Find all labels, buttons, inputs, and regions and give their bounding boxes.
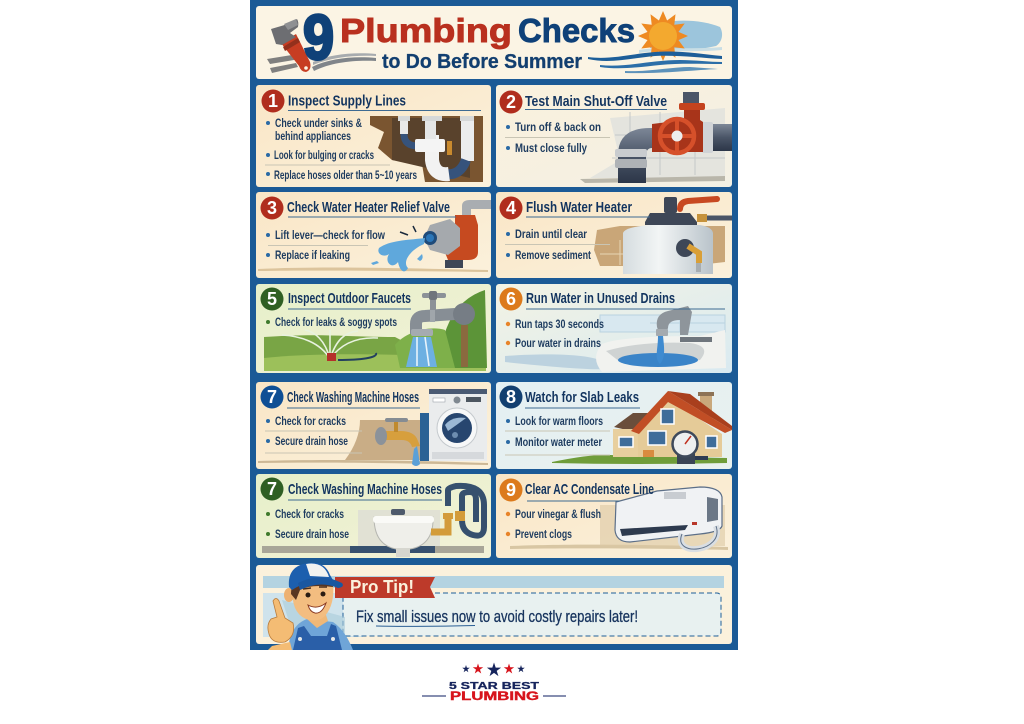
- panel: 2 test main shut-off valve: [496, 85, 732, 187]
- subtitle: to Do Before Summer: [382, 51, 582, 73]
- number badge: [500, 196, 522, 220]
- illustration: sink and hoses: [262, 486, 484, 557]
- card title: Watch for Slab Leaks: [525, 389, 639, 406]
- number badge: [500, 90, 522, 114]
- number badge: 2: [506, 92, 516, 112]
- bullet list: [266, 507, 349, 541]
- title number: 9: [303, 3, 334, 73]
- illustration: water heater tank: [594, 197, 732, 274]
- bullet list: Pour vinegar & flush: [515, 507, 601, 521]
- callout box: [343, 593, 721, 636]
- number badge: [260, 288, 284, 310]
- number badge: 9: [506, 480, 516, 500]
- bullet list: Check for cracks: [275, 414, 346, 428]
- bullet list: Remove sediment: [515, 248, 591, 262]
- illustration: valve: [580, 92, 732, 183]
- panel: 1 inspect supply lines: [256, 85, 491, 187]
- panel: 4 flush water heater: [496, 192, 732, 278]
- bullet list: Must close fully: [515, 141, 587, 155]
- logo: 5 STAR BEST: [449, 681, 539, 692]
- illustration: air conditioner: [600, 487, 725, 549]
- bullet list: [505, 227, 610, 262]
- logo: PLUMBING: [450, 691, 539, 703]
- bullet list: Check for leaks & soggy spots: [275, 315, 397, 329]
- panel: header: Checks: [518, 12, 635, 49]
- panel: 8 watch for slab leaks: [496, 382, 732, 469]
- illustration: faucet and sink: [505, 306, 726, 372]
- panel: 7 check washing machine hoses: [256, 382, 491, 469]
- bullet list: Secure drain hose: [275, 434, 348, 448]
- logo: [422, 662, 566, 703]
- card title: Clear AC Condensate Line: [525, 481, 654, 498]
- number badge: 1: [268, 91, 278, 111]
- number badge: [260, 196, 284, 220]
- panel: 6 run water in unused drains: [496, 284, 732, 373]
- background frame: [250, 0, 738, 650]
- title: Plumbing: [340, 12, 512, 49]
- bullet list: Check under sinks &: [275, 116, 362, 130]
- card title: Inspect Supply Lines: [288, 92, 406, 110]
- illustration: lawn, sprinkler and faucet: [264, 290, 487, 371]
- bullet list: Run taps 30 seconds: [515, 317, 604, 331]
- bullet list: Replace hoses older than 5~10 years: [274, 168, 417, 182]
- bullet list: Check for cracks: [275, 507, 344, 521]
- number badge: 6: [506, 289, 516, 309]
- number badge: 7: [267, 479, 277, 499]
- number badge: 8: [506, 387, 516, 407]
- card title: Test Main Shut-Off Valve: [525, 93, 667, 110]
- card title: Flush Water Heater: [526, 199, 632, 216]
- banner: pro tip: Pro Tip!: [350, 577, 414, 597]
- number badge: 7: [267, 387, 277, 407]
- number badge: 5: [267, 289, 277, 309]
- illustration: tap and washing machine: [345, 389, 487, 466]
- bullet list: Replace if leaking: [275, 248, 350, 262]
- illustration: house with water meter: [552, 391, 732, 464]
- icon: wrench and brush strokes: [267, 19, 376, 73]
- card title: Check Washing Machine Hoses: [287, 389, 419, 406]
- number badge: [260, 386, 284, 408]
- bullet list: [505, 120, 610, 155]
- bullet list: [266, 228, 386, 262]
- panel: 3 water heater relief valve: [256, 192, 491, 278]
- card title: Check Water Heater Relief Valve: [287, 199, 450, 216]
- illustration: mechanic: [268, 563, 353, 650]
- bullet list: [506, 317, 604, 350]
- logo stars: [462, 662, 525, 676]
- panel: header: [256, 3, 732, 79]
- bullet list: Secure drain hose: [275, 527, 349, 541]
- panel: 9 clear ac condensate line: [496, 474, 732, 558]
- card title: Inspect Outdoor Faucets: [288, 290, 411, 307]
- illustration: pipes under sink: [370, 116, 483, 182]
- bullet list: [266, 315, 397, 329]
- bullet list: behind appliances: [275, 129, 351, 143]
- number badge: 4: [506, 198, 516, 218]
- bullet list: Lift lever—check for flow: [275, 228, 386, 242]
- bullet list: Drain until clear: [515, 227, 587, 241]
- card title: Check Washing Machine Hoses: [288, 481, 442, 498]
- bullet list: Monitor water meter: [515, 435, 602, 449]
- bullet list: Prevent clogs: [515, 527, 572, 541]
- bullet list: [505, 414, 610, 455]
- card title: Run Water in Unused Drains: [526, 290, 675, 307]
- bullet list: Look for bulging or cracks: [274, 148, 374, 162]
- number badge: [500, 288, 522, 310]
- panel: pro tip: [256, 563, 732, 650]
- number badge: [260, 478, 284, 500]
- icon: sun and waves: [588, 11, 722, 73]
- number badge: [500, 478, 522, 502]
- tip text: Fix small issues now to avoid costly repairs later!: [356, 607, 638, 626]
- number badge: [500, 386, 522, 408]
- panel: 5 inspect outdoor faucets: [256, 284, 491, 373]
- bullet list: Pour water in drains: [515, 336, 601, 350]
- bullet list: [506, 507, 601, 541]
- bullet list: Look for warm floors: [515, 414, 603, 428]
- number badge: 3: [267, 198, 277, 218]
- illustration: relief valve spraying water: [371, 200, 491, 271]
- bullet list: [265, 414, 362, 453]
- panel: 7 check washing machine hoses (second): [256, 474, 491, 558]
- banner: pro tip: [335, 577, 435, 598]
- bullet list: Turn off & back on: [515, 120, 601, 134]
- number badge: [262, 90, 284, 112]
- bullet list: [265, 116, 417, 182]
